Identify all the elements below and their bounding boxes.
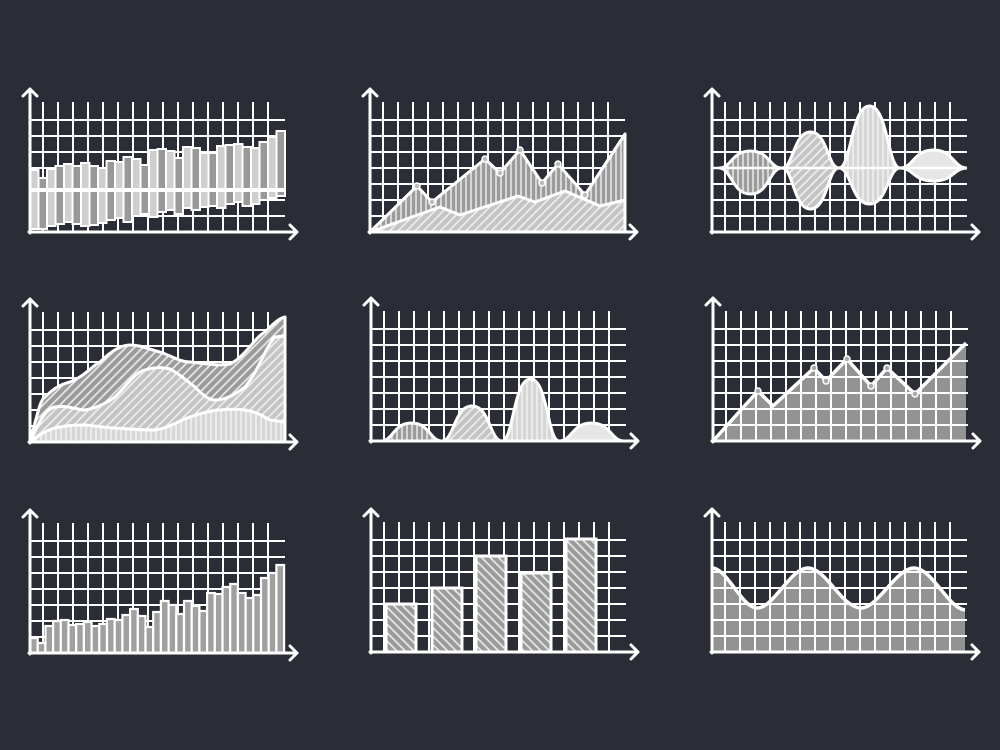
chart 9: sine wave area — [705, 509, 979, 659]
chart 3: symmetric waves — [705, 89, 979, 239]
chart 8: hatched bar chart — [364, 509, 638, 659]
chart 7: histogram — [23, 510, 297, 660]
chart 6: filled line chart — [706, 298, 980, 448]
chart 5: bell bumps — [364, 298, 638, 448]
chart 1: candlestick bars — [23, 89, 297, 239]
chart 4: layered wave areas — [23, 299, 297, 449]
chart 2: mountain area — [363, 89, 637, 239]
